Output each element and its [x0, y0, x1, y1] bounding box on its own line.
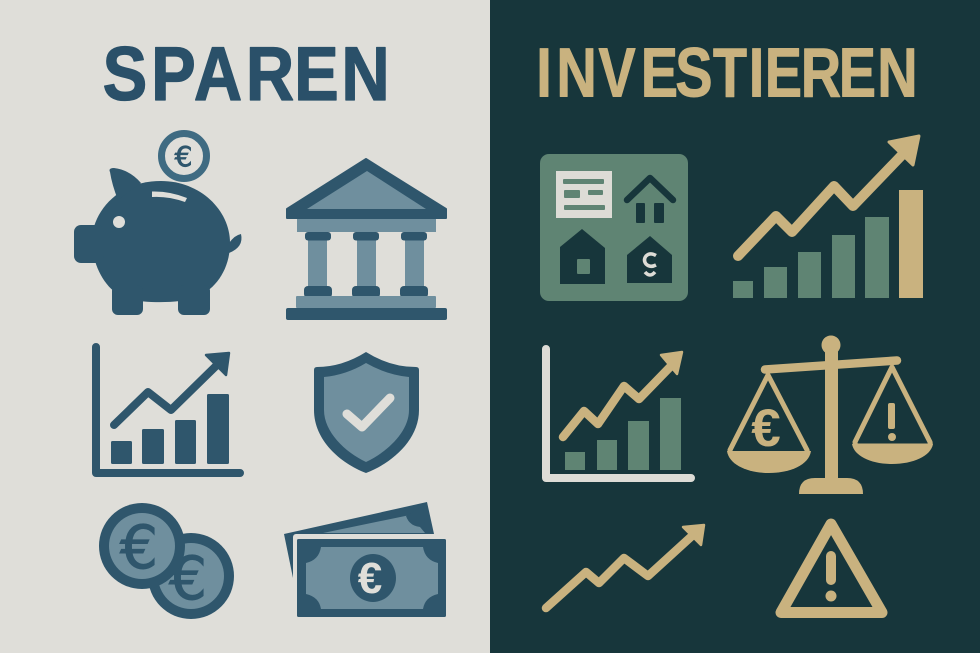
- chart: growth bars with arrow: [733, 136, 923, 298]
- title: Sparen: SPAREN: [103, 32, 390, 117]
- title: Investieren: INVESTIEREN: [536, 35, 918, 112]
- panel: Investieren: [490, 0, 980, 653]
- icon: asset tiles with document and houses: [540, 154, 688, 301]
- icon: warning triangle: [781, 524, 882, 612]
- icon: euro banknotes: €: [358, 554, 382, 603]
- icon: rising arrow: [546, 525, 704, 608]
- icon: piggy bank with coin: [74, 134, 242, 315]
- icon: shield with checkmark: [314, 352, 419, 473]
- icon: euro coins: €: [169, 544, 207, 614]
- icon: piggy bank with coin: €: [175, 140, 192, 173]
- icon: euro coins: €: [120, 513, 158, 583]
- panel: Sparen: [0, 0, 490, 653]
- icon: bank building: [286, 159, 447, 320]
- icon: balance scale with euro and warning: [727, 336, 933, 494]
- icon: balance scale with euro and warning: €: [751, 399, 781, 458]
- icon: euro banknotes: [284, 502, 446, 618]
- chart: rising savings bars: [96, 347, 240, 473]
- icon: euro coins: [99, 503, 234, 619]
- chart: investment bars with axis: [546, 349, 691, 478]
